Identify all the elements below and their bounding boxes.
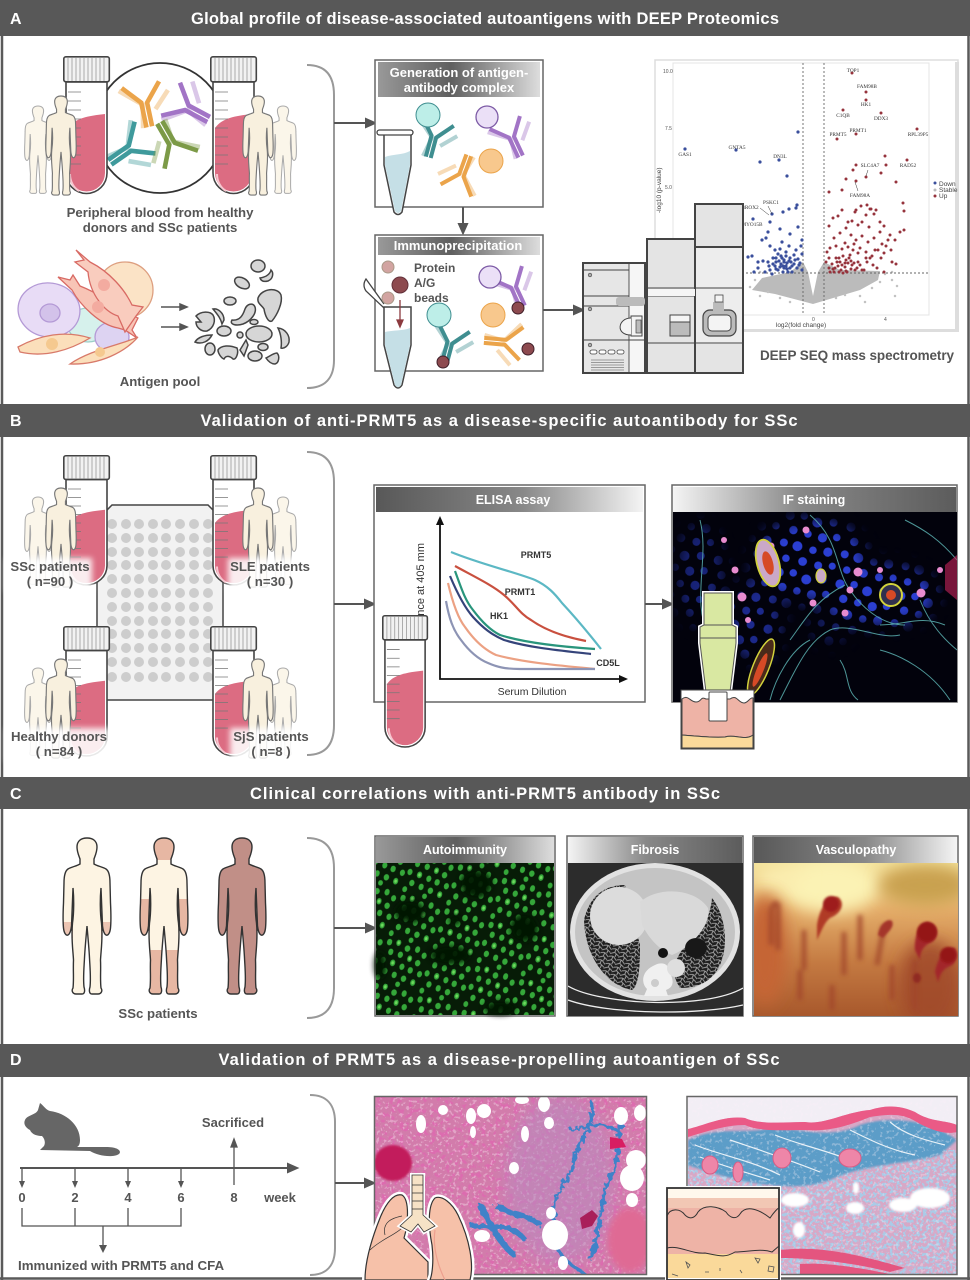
gene labels: GNTA5 [729,145,746,151]
gene labels: C1QB [836,113,850,119]
group: SLE patients: SLE patients [230,559,310,574]
gene labels [678,68,929,228]
y axis ticks: 4 [884,317,887,323]
icon: figure with limited skin change [60,838,114,994]
box: vasculopathy [752,835,959,1017]
image: ANA green nuclei [374,863,554,1015]
non-significant points [750,262,897,304]
gene labels: PSKC1 [763,200,779,206]
group: healthy donors [6,627,110,762]
time labels: 8 [230,1190,238,1205]
arrow: ELISA to IF [645,600,672,608]
header: fibrosis [568,837,742,863]
image: nailfold capillaries [754,863,958,1016]
y axis ticks: 5.0 [665,185,672,191]
icon: cells [15,250,153,364]
y axis title: -log10 (p-value) [656,167,663,213]
icon: antigen-antibody complexes [409,103,541,198]
header: fibrosis: Fibrosis [631,843,679,857]
icon: lungs [365,1175,472,1280]
panel D: disease-propelling autoantigen [0,1044,970,1280]
heading B: B [10,413,22,430]
heading D: D [10,1052,22,1069]
panel C: clinical correlations [0,777,970,1030]
icon: 96-well plate [97,505,223,700]
curve: navy [450,576,591,654]
icon: biopsy punch [700,593,736,692]
curve labels: HK1 [490,611,508,621]
y axis ticks: 7.5 [665,126,672,132]
gene labels: DDX3 [874,116,888,122]
image: skin histology [688,1097,957,1274]
legend: Down [939,181,956,188]
plot frame [673,63,929,315]
gene labels: PRMT5 [829,132,847,138]
header: ELISA: ELISA assay [476,493,550,507]
time labels: 0 [18,1190,26,1205]
heading D [0,1044,970,1077]
y axis ticks: 0 [812,317,815,323]
curve labels: PRMT1 [505,587,535,597]
image frame: lung histology [374,1096,646,1274]
gene labels: GAS1 [678,152,692,158]
icon: skin block [681,690,754,749]
label: protein A/G beads: beads [414,291,449,305]
header: immunoprecipitation: Immunoprecipitation [394,238,522,253]
time labels [18,1190,297,1205]
bracket C [307,838,334,1018]
heading A: Global profile of disease-associated autoantigens with DEEP Proteomics [191,10,779,28]
box: fibrosis [567,836,743,1016]
header: vasculopathy: Vasculopathy [816,843,896,857]
curve labels: PRMT5 [521,550,551,560]
box: generation of antigen-antibody complex [375,60,543,214]
group: SSc patients [6,456,109,592]
box: autoimmunity [374,836,555,1016]
x axis title: log2(fold change) [776,322,826,329]
icon: antibody circle [95,63,225,193]
threshold lines [730,63,929,315]
timeline [18,1115,297,1273]
heading A [0,0,970,36]
curve: PRMT1 [455,566,586,641]
arrow: sacrificed [231,1139,237,1185]
heading B: Validation of anti-PRMT5 as a disease-specific autoantibody for SSc [200,412,798,430]
header: autoimmunity: Autoimmunity [423,843,507,857]
bracket B [307,452,334,755]
box: ELISA assay [374,485,645,747]
caption: SSc patients: SSc patients [118,1006,198,1021]
gene labels: FAM98B [857,84,877,90]
time labels: 6 [177,1190,185,1205]
icon: serum tube [383,616,427,747]
bracket A [307,65,334,388]
gene labels: BROX2 [741,205,759,211]
down-regulated points [685,132,802,274]
x axis arrow [619,675,628,683]
legend [934,181,958,200]
label: sacrificed: Sacrificed [202,1115,264,1130]
x axis label: Serum Dilution [498,686,567,698]
time labels: 4 [124,1190,132,1205]
group: SjS patients: SjS patients [233,729,309,744]
y axis arrow [436,516,444,525]
header: vasculopathy [754,837,957,863]
gene labels: RPL39P5 [908,132,929,138]
gene labels: SLC4A7 [861,163,880,169]
bracket D [310,1095,335,1275]
gene labels: FAM98A [850,193,870,199]
icon: right blood tube with patients [211,57,296,195]
gene labels: HK1 [861,102,871,108]
gene labels: TOP1 [847,68,860,74]
icon: mouse [24,1103,120,1156]
legend: Stable [939,187,958,194]
arrow: complex to immunoprecipitation [459,207,467,233]
group: healthy donors: Healthy donors [11,729,107,744]
legend: Up [939,193,948,200]
icon: antigen fragments [195,260,289,364]
header: generation: Generation of antigen- [390,65,528,80]
y axis label: Absorbance at 405 mm [415,543,427,657]
image: chest CT [568,863,743,1016]
heading C: Clinical correlations with anti-PRMT5 antibody in SSc [250,785,720,803]
curve: CD5L [446,601,595,669]
label: protein A/G beads: A/G [414,276,435,290]
header: generation [378,62,540,97]
gene labels: MYO15B [741,222,763,228]
heading D: Validation of PRMT5 as a disease-propelling autoantigen of SSc [218,1051,780,1069]
arrows: lysis [161,304,187,330]
box: immunoprecipitation [364,235,543,388]
group: SSc patients: SSc patients [10,559,90,574]
caption: DEEP SEQ mass spectrometry: DEEP SEQ mass spectrometry [760,348,954,363]
label: protein A/G beads: Protein [414,261,455,275]
icon: skin section [665,1186,781,1280]
arrow: bracket to histology [335,1179,374,1187]
caption: peripheral blood: Peripheral blood from healthy [67,205,253,220]
arrow: bracket to complex generation [334,119,375,127]
group: SjS patients: ( n=8 ) [251,744,291,759]
icon: figure with diffuse skin change [218,838,266,994]
arrow: bracket to clinical images [334,924,375,932]
curve: PRMT5 [451,552,601,649]
heading C [0,777,970,809]
immunization bracket [22,1208,181,1248]
y axis ticks: 10.0 [663,69,673,75]
header: IF: IF staining [783,493,845,507]
header: IF [673,487,956,512]
gene labels: PRMT1 [849,128,867,134]
panel B: validation of anti-PRMT5 [0,404,970,1280]
label leader lines [760,170,868,215]
heading A: A [10,11,22,28]
image: lung histology [374,1095,652,1274]
arrow: bracket to ELISA [334,600,374,608]
caption: antigen pool: Antigen pool [120,374,200,389]
header: ELISA [376,487,643,512]
group: SLE patients: ( n=30 ) [247,574,293,589]
arrow: IP to mass spectrometer [543,306,583,314]
image: immunofluorescence [673,512,957,702]
gene labels: RAD52 [900,163,917,169]
icon: tube with beads [364,261,411,388]
chart: volcano plot [655,60,959,332]
image frame: skin histology [687,1096,957,1274]
y axis ticks [663,69,887,323]
curve: HK1 [455,571,595,649]
header: immunoprecipitation [378,237,540,255]
caption: peripheral blood: donors and SSc patients [83,220,237,235]
header: generation: antibody complex [404,80,515,95]
group: healthy donors: ( n=84 ) [36,744,82,759]
icon: biopsy punch outline [700,593,736,692]
icon: figure with partial skin change [139,837,189,995]
icon: immunoprecipitated complexes [425,263,543,369]
icon: mass spectrometer [583,204,743,373]
heading C: C [10,786,22,803]
heading B [0,404,970,437]
up-regulated points [826,73,917,273]
curve: salmon [448,583,595,669]
curve labels: CD5L [596,658,620,668]
vessels [742,537,902,698]
curve labels [490,550,620,668]
label: immunized: Immunized with PRMT5 and CFA [18,1258,225,1273]
icon: tube [377,130,413,214]
box: IF staining [672,485,957,749]
arrow: immunization [99,1245,107,1253]
panel A: global profile of autoantigens [0,0,970,389]
chart axes [440,520,622,679]
icon: left blood tube with donors [25,57,109,195]
header: autoimmunity [376,837,554,863]
group: SLE patients [211,456,312,592]
group: SSc patients: ( n=90 ) [27,574,73,589]
time labels: 2 [71,1190,79,1205]
time labels: week [263,1190,297,1205]
group: SjS patients [211,627,312,762]
gene labels: DN3L [773,154,787,160]
